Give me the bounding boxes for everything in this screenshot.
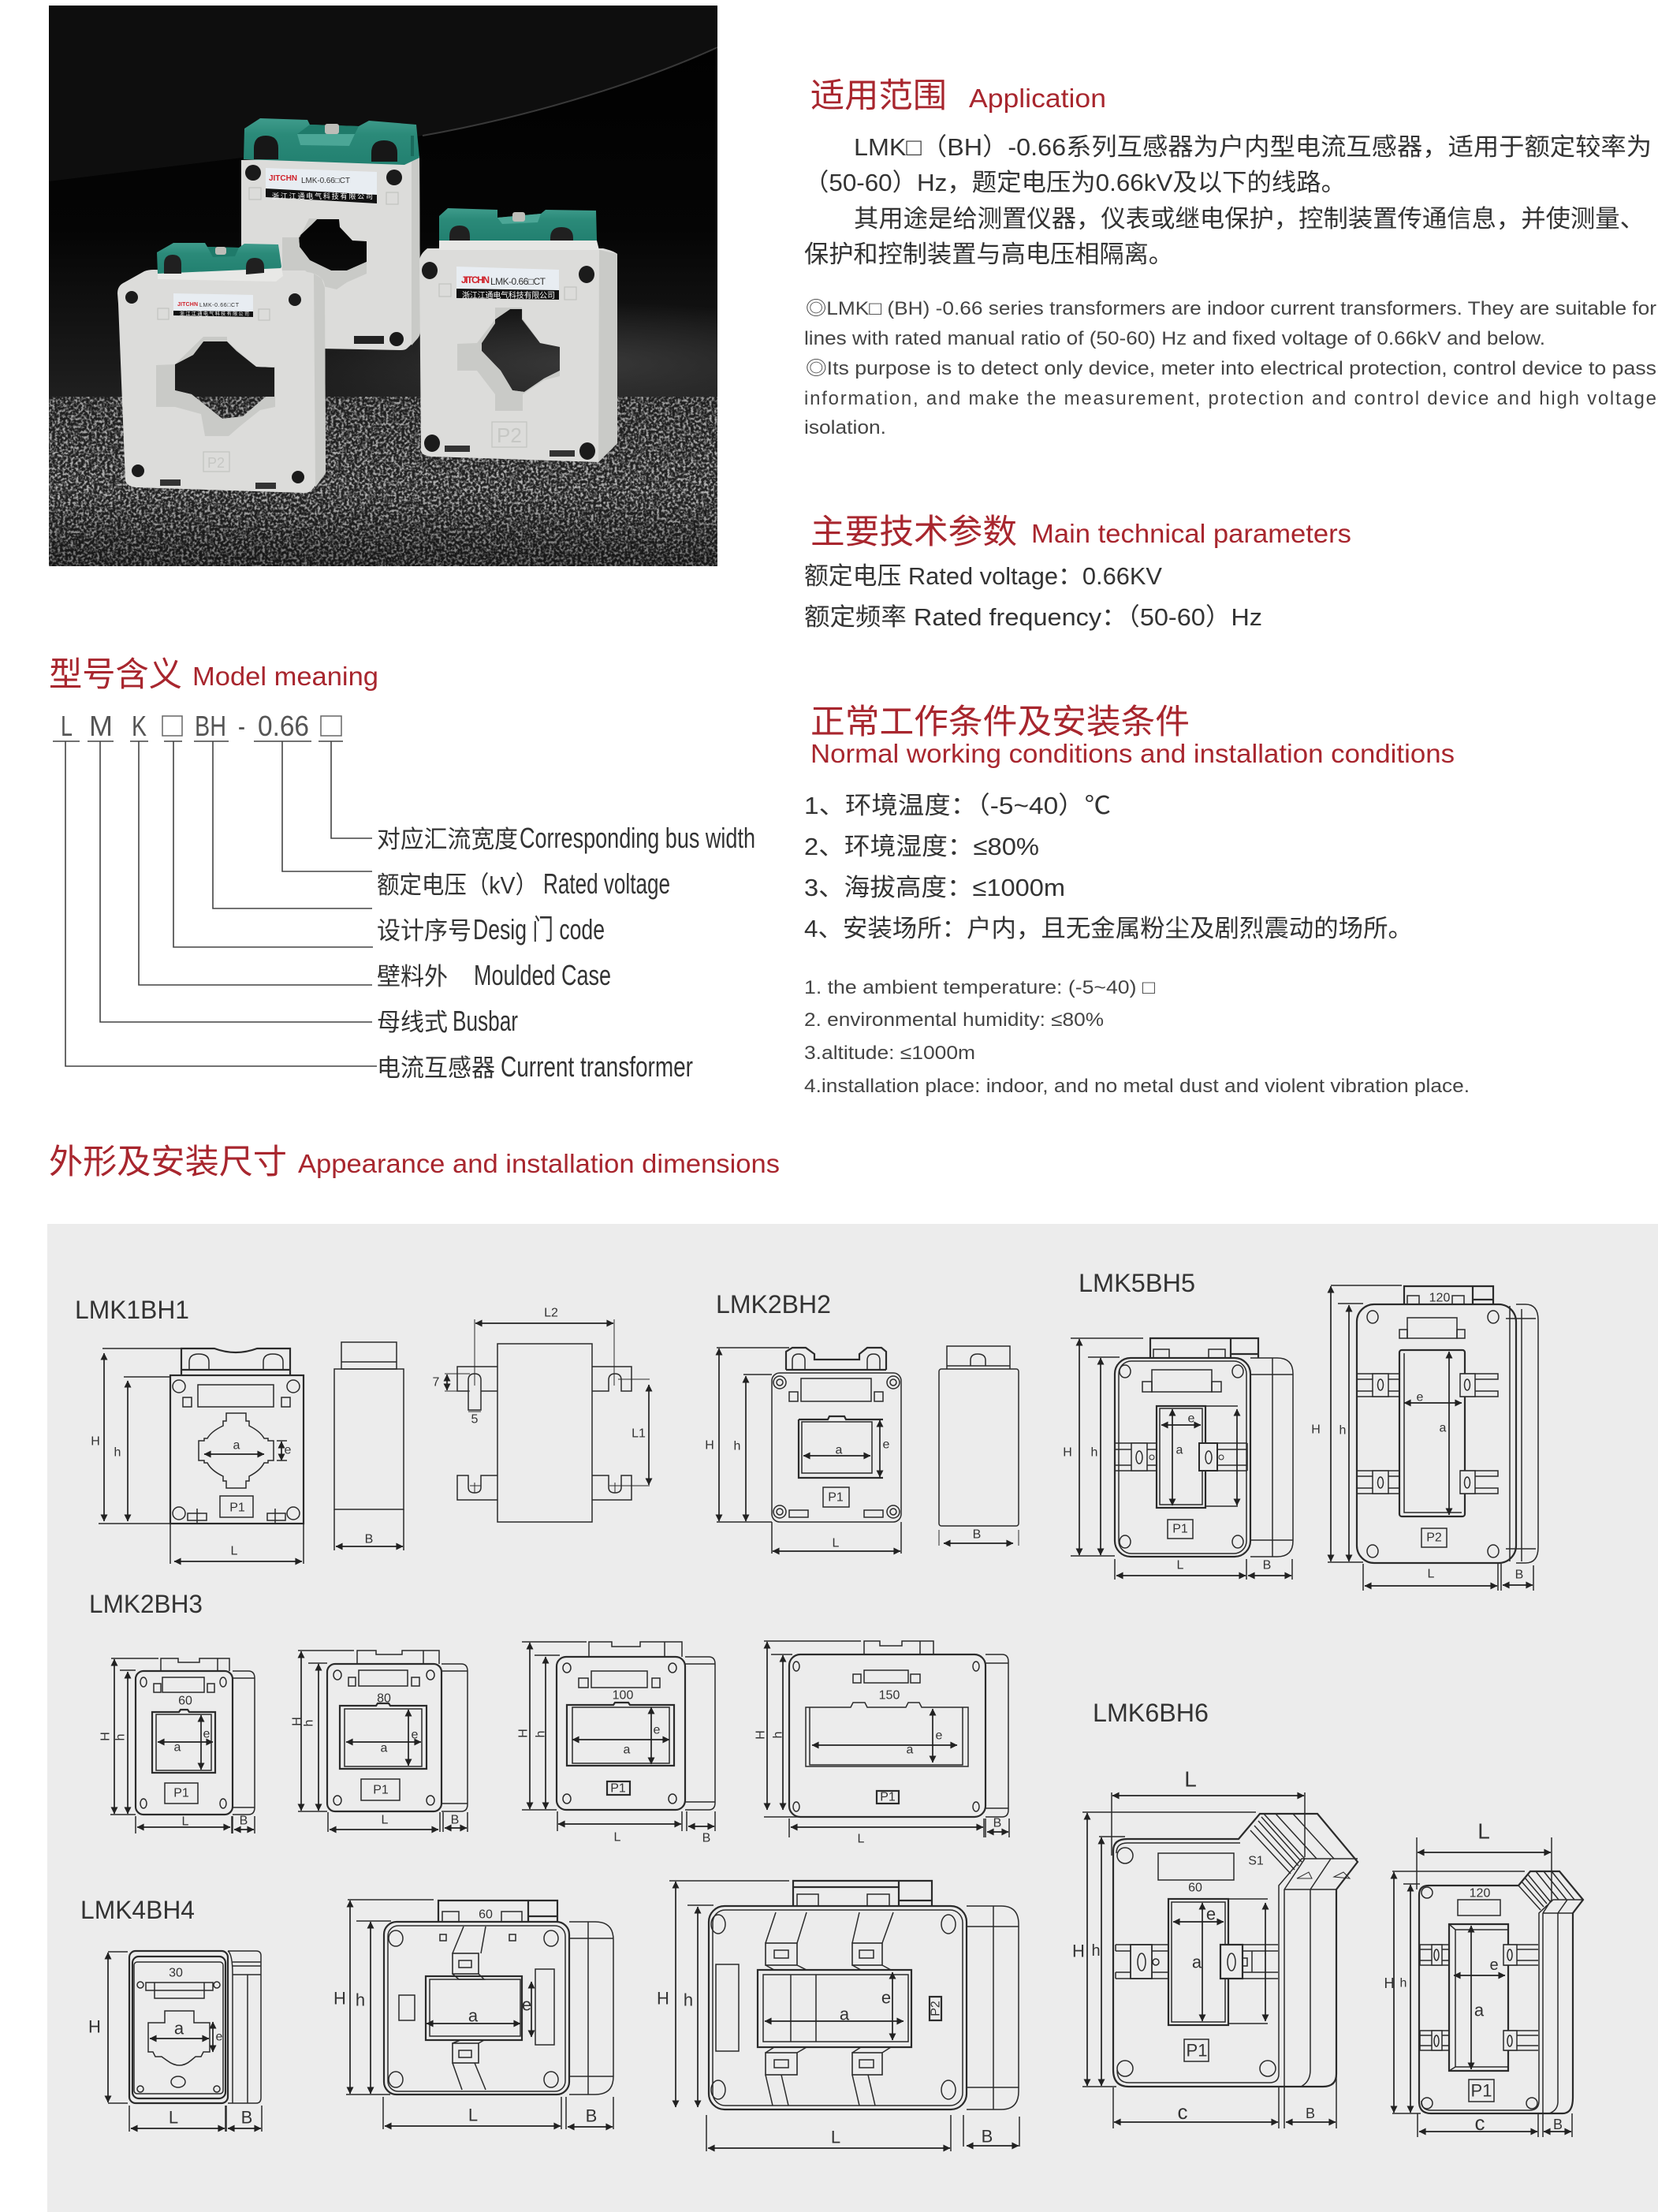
- drawing: LMK4BH4 30 window: a: [174, 2019, 184, 2038]
- drawing: LMK4BH4 large window: e: [881, 1987, 891, 2008]
- text block: conditions chinese: 1、环境温度：（-5~40）℃: [804, 792, 1111, 819]
- model code descriptions: 额定电压（kV）: [377, 871, 538, 899]
- product: front left transformer: JITCHN: [177, 302, 198, 308]
- drawing: LMK2BH3 150 window: a: [907, 1743, 914, 1757]
- product: front left transformer: [117, 243, 326, 493]
- text block: conditions english: 2. environmental humidity: ≤80%: [804, 1009, 1104, 1031]
- model code letters: K: [132, 710, 147, 742]
- drawing: LMK6BH6 60 window: S1: [1248, 1855, 1264, 1867]
- drawing: LMK2BH3 150 window: H: [754, 1730, 768, 1740]
- drawing: LMK5BH5 rear view: e: [1417, 1391, 1424, 1404]
- model code letters: -: [238, 710, 245, 742]
- heading: application: Application: [969, 84, 1106, 113]
- text block: conditions chinese: 3、海拔高度：≤1000m: [804, 874, 1065, 901]
- drawing: LMK4BH4 large window: [657, 1881, 1019, 2151]
- heading: main technical parameters: Main technical parameters: [1031, 519, 1351, 548]
- model code descriptions: Moulded Case: [474, 959, 611, 991]
- product: front left transformer: 浙江江通电气科技有限公司: [180, 311, 249, 317]
- drawing: LMK2BH3 150 window: h: [771, 1732, 785, 1738]
- product: back transformer: 浙江江通电气科技有限公司: [272, 192, 373, 200]
- drawing: LMK5BH5 rear view: P2: [1426, 1531, 1442, 1544]
- drawing: LMK2BH3 150 window: L: [858, 1833, 865, 1845]
- model code descriptions: Rated voltage: [543, 867, 670, 900]
- drawing: LMK4BH4 30 window: B: [241, 2107, 252, 2128]
- drawing: LMK4BH4 30 window: H: [88, 2017, 101, 2036]
- model code descriptions: Desig 门 code: [473, 913, 605, 946]
- drawing: LMK2BH2 front view: P1: [828, 1490, 844, 1505]
- drawing: LMK4BH4 60 window: L: [468, 2106, 478, 2124]
- drawing: LMK4BH4 large window: B: [982, 2126, 993, 2147]
- model code descriptions: Corresponding bus width: [520, 822, 755, 854]
- text block: application english: ◎Its purpose is to detect only device, meter into electrical protection, control device to pass: [806, 358, 1656, 379]
- product: right transformer: [419, 208, 617, 462]
- drawing: LMK2BH3 100 window: P1: [610, 1782, 626, 1795]
- drawing: LMK1BH1 side view: [334, 1342, 404, 1550]
- drawing: LMK2BH3 150 window: P1: [880, 1790, 896, 1804]
- model code descriptions: 设计序号: [377, 917, 471, 945]
- drawing: LMK5BH5 front view: a: [1176, 1443, 1183, 1457]
- product: back transformer: [241, 118, 420, 350]
- drawing: LMK6BH6 60 window: h: [1091, 1942, 1101, 1960]
- product: right transformer: P2: [497, 423, 522, 447]
- text block: application chinese: （50-60）Hz，题定电压为0.66kV及以下的线路。: [804, 169, 1346, 196]
- text block: application chinese: 其用途是给测置仪器，仪表或继电保护，控制装置传通信息，并使测量、: [854, 205, 1645, 233]
- drawing: LMK5BH5 rear view: B: [1515, 1568, 1523, 1582]
- drawing: LMK6BH6 60 window: e: [1206, 1904, 1216, 1924]
- model code letters: M: [89, 710, 113, 742]
- drawing: LMK6BH6 60 window: 60: [1188, 1882, 1202, 1894]
- drawing: LMK6BH6 60 window: L: [1184, 1766, 1197, 1792]
- drawing: LMK6BH6 60 window: H: [1072, 1942, 1085, 1960]
- heading: main technical parameters: 主要技术参数: [810, 513, 1017, 551]
- terminals: [453, 1927, 486, 2090]
- text block: conditions chinese: [804, 792, 1413, 942]
- drawing: LMK1BH1 front view: a: [233, 1438, 240, 1453]
- terminals: [766, 1912, 893, 2106]
- drawing: LMK2BH3 100 window: L: [614, 1831, 621, 1844]
- drawing: LMK6BH6 60 window: [1072, 1766, 1358, 2128]
- drawing: LMK1BH1 mounting view: [433, 1306, 650, 1522]
- text block: conditions english: [804, 977, 1470, 1097]
- heading: model meaning: Model meaning: [192, 662, 378, 691]
- model code letters: [61, 710, 341, 742]
- drawing: LMK6BH6 120 window: 120: [1470, 1886, 1490, 1901]
- drawing: LMK2BH2 front view: [705, 1348, 901, 1554]
- drawing: LMK1BH1 front view: L: [231, 1544, 238, 1558]
- drawing: LMK2BH2 side view: B: [973, 1528, 981, 1541]
- model label LMK2BH2: LMK2BH2: [716, 1290, 831, 1319]
- drawing: LMK2BH3 100 window: B: [702, 1831, 710, 1845]
- drawing: LMK2BH3 60 window: L: [182, 1815, 189, 1828]
- drawing: LMK6BH6 60 window: a: [1192, 1953, 1202, 1971]
- drawing: LMK5BH5 front view: B: [1263, 1558, 1271, 1572]
- text block: conditions english: 3.altitude: ≤1000m: [804, 1043, 975, 1064]
- terminals: [1115, 1443, 1247, 1471]
- drawing: LMK2BH3 60 window: [99, 1658, 255, 1833]
- model label LMK5BH5: LMK5BH5: [1079, 1269, 1195, 1297]
- terminals: [1116, 1945, 1278, 1979]
- drawing: LMK5BH5 front view: e: [1188, 1412, 1195, 1426]
- drawing: LMK4BH4 60 window: [333, 1900, 613, 2129]
- drawing: LMK5BH5 front view: [1063, 1338, 1293, 1580]
- heading: working conditions: Normal working conditions and installation conditions: [810, 739, 1455, 768]
- heading: application: 适用范围: [810, 77, 947, 115]
- drawing: LMK1BH1 mounting view: 5: [471, 1413, 479, 1426]
- drawing: LMK2BH3 80 window: 80: [377, 1692, 391, 1705]
- drawing: LMK6BH6 60 window: c: [1178, 2100, 1187, 2124]
- drawing: LMK2BH3 100 window: H: [517, 1729, 530, 1738]
- drawing: LMK2BH3 60 window: a: [174, 1741, 181, 1754]
- model code letters: 0.66: [258, 710, 309, 742]
- model label LMK1BH1: LMK1BH1: [75, 1296, 189, 1324]
- heading: model meaning: 型号含义: [49, 656, 182, 694]
- model code descriptions: 对应汇流宽度: [377, 826, 518, 853]
- model code letters: BH: [195, 710, 226, 742]
- drawing: LMK1BH1 front view: H: [91, 1435, 100, 1448]
- model label LMK6BH6: LMK6BH6: [1093, 1699, 1209, 1727]
- product: back transformer: JITCHN: [269, 174, 297, 183]
- drawing: LMK4BH4 large window: a: [840, 2005, 850, 2024]
- text block: application english: [804, 298, 1656, 438]
- product: front left transformer: P2: [207, 455, 225, 471]
- heading: working conditions: [810, 703, 1455, 768]
- drawing: LMK4BH4 large window: H: [657, 1989, 669, 2008]
- drawing: LMK4BH4 30 window: e: [216, 2030, 223, 2044]
- drawing: LMK2BH3 150 window: 150: [879, 1689, 900, 1702]
- text block: conditions english: 1. the ambient temperature: (-5~40) □: [804, 977, 1156, 998]
- drawing: LMK1BH1 front view: [91, 1348, 304, 1564]
- drawing: LMK1BH1 front view: P1: [229, 1501, 245, 1514]
- drawing: LMK6BH6 120 window: [1384, 1818, 1583, 2137]
- drawing: LMK2BH2 front view: h: [734, 1440, 740, 1453]
- drawing: LMK6BH6 120 window: h: [1400, 1976, 1407, 1990]
- text block: application english: lines with rated manual ratio of (50-60) Hz and fixed voltage of 0.66kV and below.: [804, 328, 1545, 349]
- drawing: LMK2BH2 side view: [939, 1346, 1019, 1546]
- drawing: LMK4BH4 60 window: B: [586, 2106, 597, 2126]
- drawing: LMK2BH3 80 window: P1: [373, 1784, 389, 1796]
- drawing: LMK2BH3 80 window: L: [382, 1814, 389, 1826]
- product: right transformer: LMK-0.66□CT: [490, 276, 546, 287]
- drawing: LMK4BH4 60 window: H: [333, 1989, 346, 2008]
- drawing: LMK2BH3 60 window: h: [114, 1734, 128, 1740]
- panel: dimension drawings: [47, 1224, 1658, 2212]
- model code leader lines: [53, 741, 377, 1066]
- text block: conditions english: 4.installation place: indoor, and no metal dust and violent vibration place.: [804, 1076, 1470, 1097]
- drawing: LMK2BH3 100 window: h: [535, 1731, 547, 1737]
- drawing: LMK2BH3 100 window: e: [654, 1724, 661, 1736]
- product: right transformer: 浙江江通电气科技有限公司: [462, 290, 555, 300]
- text block: technical parameters: 额定电压 Rated voltage：0.66KV: [804, 562, 1162, 590]
- drawing: LMK2BH2 front view: L: [833, 1536, 840, 1550]
- drawing: LMK1BH1 side view: B: [365, 1533, 373, 1546]
- drawing: LMK2BH3 150 window: e: [936, 1729, 943, 1743]
- drawing: LMK6BH6 120 window: P1: [1471, 2080, 1492, 2101]
- drawing: LMK5BH5 front view: P1: [1172, 1522, 1188, 1536]
- model code descriptions: 壁料外: [377, 963, 448, 990]
- product: back transformer: LMK-0.66□CT: [301, 177, 350, 185]
- drawing: LMK6BH6 120 window: c: [1474, 2111, 1485, 2135]
- drawing: LMK4BH4 60 window: h: [356, 1990, 365, 2009]
- drawing: LMK2BH3 100 window: 100: [613, 1689, 633, 1702]
- drawing: LMK2BH3 80 window: [290, 1651, 468, 1832]
- drawing: LMK4BH4 30 window: 30: [169, 1967, 183, 1979]
- drawing: LMK6BH6 120 window: a: [1474, 2000, 1485, 2020]
- drawing: LMK6BH6 120 window: L: [1477, 1818, 1490, 1844]
- drawing: LMK6BH6 120 window: H: [1384, 1975, 1394, 1991]
- model code descriptions: Busbar: [453, 1005, 518, 1037]
- drawing: LMK2BH3 80 window: h: [303, 1720, 315, 1726]
- heading: appearance and installation dimensions: [49, 1143, 780, 1181]
- heading: appearance and installation dimensions: 外形及安装尺寸: [49, 1143, 287, 1181]
- drawing: LMK2BH3 100 window: [517, 1642, 715, 1845]
- text block: technical parameters: [804, 562, 1262, 631]
- heading: application: [810, 77, 1106, 115]
- drawing: LMK2BH2 front view: H: [705, 1438, 714, 1453]
- drawing: LMK2BH3 80 window: B: [451, 1814, 459, 1826]
- drawing: LMK6BH6 120 window: B: [1553, 2117, 1563, 2132]
- drawing: LMK2BH3 150 window: [754, 1641, 1009, 1845]
- terminals: [1420, 1945, 1538, 2050]
- drawing: LMK5BH5 rear view: 120: [1429, 1292, 1450, 1304]
- drawing: LMK6BH6 60 window: P1: [1187, 2041, 1207, 2060]
- drawing: LMK4BH4 60 window: 60: [479, 1908, 493, 1921]
- text block: application english: ◎LMK□ (BH) -0.66 series transformers are indoor current transformers. They are suitable for: [806, 298, 1656, 319]
- model label LMK4BH4: LMK4BH4: [80, 1896, 195, 1924]
- drawing: LMK4BH4 large window: h: [684, 1990, 693, 2009]
- text block: application chinese: [804, 133, 1652, 268]
- drawing: LMK2BH3 60 window: P1: [173, 1787, 189, 1800]
- drawing: LMK5BH5 rear view: L: [1428, 1568, 1435, 1580]
- drawing: LMK5BH5 rear view: a: [1440, 1421, 1447, 1435]
- product: front left transformer: LMK-0.66□CT: [199, 303, 240, 308]
- heading: main technical parameters: [810, 513, 1351, 551]
- drawing: LMK6BH6 60 window: B: [1306, 2106, 1315, 2121]
- drawing: LMK4BH4 large window: L: [831, 2128, 840, 2147]
- drawing: LMK1BH1 mounting view: L2: [544, 1306, 558, 1320]
- drawing: LMK4BH4 30 window: [88, 1951, 262, 2132]
- model code descriptions: 电流互感器: [377, 1054, 495, 1082]
- text block: technical parameters: 额定频率 Rated frequency：（50-60）Hz: [804, 603, 1262, 631]
- drawing: LMK2BH3 60 window: 60: [178, 1694, 192, 1708]
- model label LMK2BH3: LMK2BH3: [89, 1590, 203, 1618]
- drawing: LMK5BH5 front view: L: [1177, 1558, 1184, 1572]
- drawing: LMK2BH3 60 window: e: [203, 1727, 211, 1741]
- text block: application english: isolation.: [804, 417, 886, 438]
- drawing: LMK2BH3 80 window: H: [290, 1717, 304, 1726]
- text block: conditions chinese: 2、环境湿度：≤80%: [804, 833, 1039, 860]
- drawing: LMK4BH4 30 window: L: [169, 2107, 178, 2128]
- drawing: LMK5BH5 rear view: [1311, 1285, 1538, 1591]
- drawing: LMK5BH5 rear view: h: [1339, 1424, 1346, 1437]
- model code descriptions: 母线式: [377, 1009, 448, 1036]
- drawing: LMK2BH3 60 window: B: [240, 1814, 248, 1828]
- drawing: LMK1BH1 mounting view: 7: [433, 1375, 440, 1389]
- heading: appearance and installation dimensions: Appearance and installation dimensions: [298, 1149, 780, 1178]
- heading: model meaning: [49, 656, 378, 694]
- heading: working conditions: 正常工作条件及安装条件: [810, 703, 1190, 741]
- drawing: LMK1BH1 front view: e: [285, 1443, 292, 1457]
- text block: application chinese: 保护和控制装置与高电压相隔离。: [804, 241, 1173, 268]
- drawing: LMK2BH3 80 window: e: [412, 1729, 419, 1741]
- model code descriptions: Current transformer: [501, 1050, 693, 1083]
- product: right transformer: JITCHN: [461, 274, 490, 285]
- drawing: LMK2BH3 150 window: B: [993, 1817, 1001, 1830]
- drawing: LMK2BH2 front view: a: [836, 1443, 843, 1457]
- drawing: LMK5BH5 front view: H: [1063, 1446, 1072, 1459]
- drawing: LMK1BH1 mounting view: L1: [632, 1427, 646, 1440]
- drawing: LMK4BH4 60 window: e: [522, 1995, 531, 2014]
- drawing: LMK2BH3 80 window: a: [381, 1741, 388, 1755]
- text block: application chinese: LMK□（BH）-0.66系列互感器为户内型电流互感器，适用于额定较率为: [854, 133, 1652, 161]
- drawing: LMK2BH3 100 window: a: [624, 1743, 631, 1757]
- drawing: LMK5BH5 front view: h: [1091, 1446, 1097, 1459]
- drawing: LMK2BH3 60 window: H: [99, 1732, 112, 1741]
- terminals: [1357, 1374, 1498, 1494]
- drawing: LMK4BH4 60 window: a: [468, 2006, 479, 2025]
- model code descriptions: [377, 822, 755, 1083]
- drawing: LMK4BH4 large window: P2: [929, 2001, 943, 2016]
- drawing: LMK1BH1 front view: h: [114, 1446, 121, 1459]
- text block: application english: information, and make the measurement, protection and control device and high voltage: [804, 388, 1656, 409]
- text block: conditions chinese: 4、安装场所：户内，且无金属粉尘及剧烈震动的场所。: [804, 915, 1413, 942]
- product photo: [49, 6, 717, 566]
- drawing: LMK5BH5 rear view: H: [1311, 1423, 1321, 1437]
- model code letters: L: [61, 710, 73, 742]
- drawing: LMK2BH2 front view: e: [883, 1438, 890, 1451]
- drawing: LMK6BH6 120 window: e: [1489, 1956, 1499, 1974]
